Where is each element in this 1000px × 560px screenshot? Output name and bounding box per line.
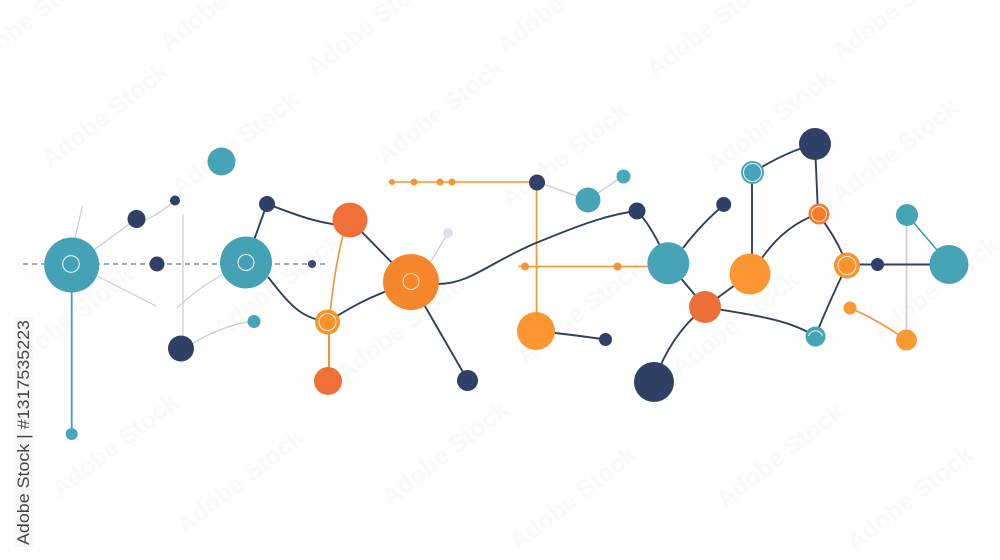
watermarks: Adobe Stock xyxy=(511,254,649,370)
nodes: center cluster xyxy=(314,170,646,395)
watermarks: Adobe Stock xyxy=(36,58,174,174)
orange connectors xyxy=(329,182,906,381)
watermarks: Adobe Stock xyxy=(841,441,979,557)
node: large teal hub left xyxy=(44,238,99,292)
navy connectors xyxy=(254,144,949,382)
node: orange ring upper xyxy=(808,204,830,224)
watermarks: Adobe Stock xyxy=(371,54,509,170)
watermarks: Adobe Stock xyxy=(866,231,1000,347)
watermarks: Adobe Stock xyxy=(496,98,634,214)
light grey connectors xyxy=(75,176,906,343)
teal connectors xyxy=(72,215,949,434)
watermarks: Adobe Stock xyxy=(376,396,514,512)
node: orange ring right xyxy=(834,252,860,278)
node: large teal hub center-left xyxy=(220,236,272,288)
node: large orange hub xyxy=(383,254,439,310)
nodes: right cluster xyxy=(634,128,968,402)
watermarks: Adobe Stock xyxy=(666,266,804,382)
watermarks: Adobe Stock xyxy=(166,86,304,202)
node: teal ring bottom xyxy=(806,326,826,346)
watermarks: Adobe Stock xyxy=(1,261,139,377)
watermarks: Adobe Stock xyxy=(208,228,346,344)
nodes: left cluster xyxy=(44,148,316,440)
watermarks: Adobe Stock xyxy=(701,64,839,180)
node: orange ring xyxy=(315,310,340,334)
watermarks: Adobe Stock xyxy=(711,398,849,514)
stock credit: Adobe Stock | #1317535223 xyxy=(15,320,33,545)
watermarks: Adobe Stock xyxy=(171,424,309,540)
node: teal ring top xyxy=(741,161,764,184)
dashed axis xyxy=(23,263,328,265)
watermarks: Adobe Stock xyxy=(46,388,184,504)
watermarks: Adobe Stock xyxy=(826,94,964,210)
watermarks: Adobe Stock xyxy=(504,441,642,557)
watermarks: Adobe Stock xyxy=(331,271,469,387)
